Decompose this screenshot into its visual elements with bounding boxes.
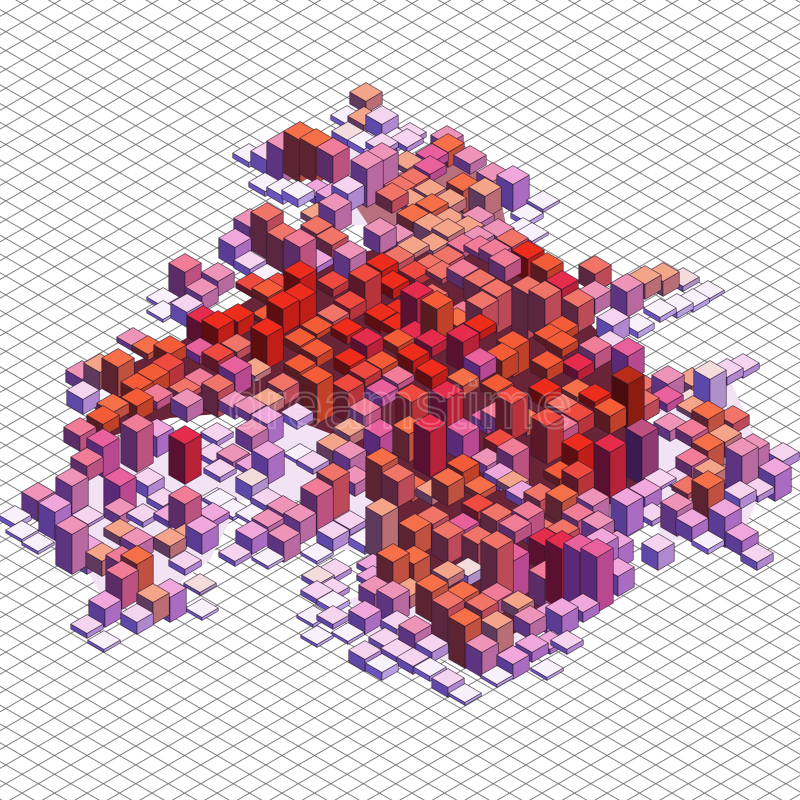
watermark: dreamstime [228, 368, 572, 442]
shaded footprint under the bars [70, 125, 770, 670]
isometric bar chart [0, 83, 799, 705]
